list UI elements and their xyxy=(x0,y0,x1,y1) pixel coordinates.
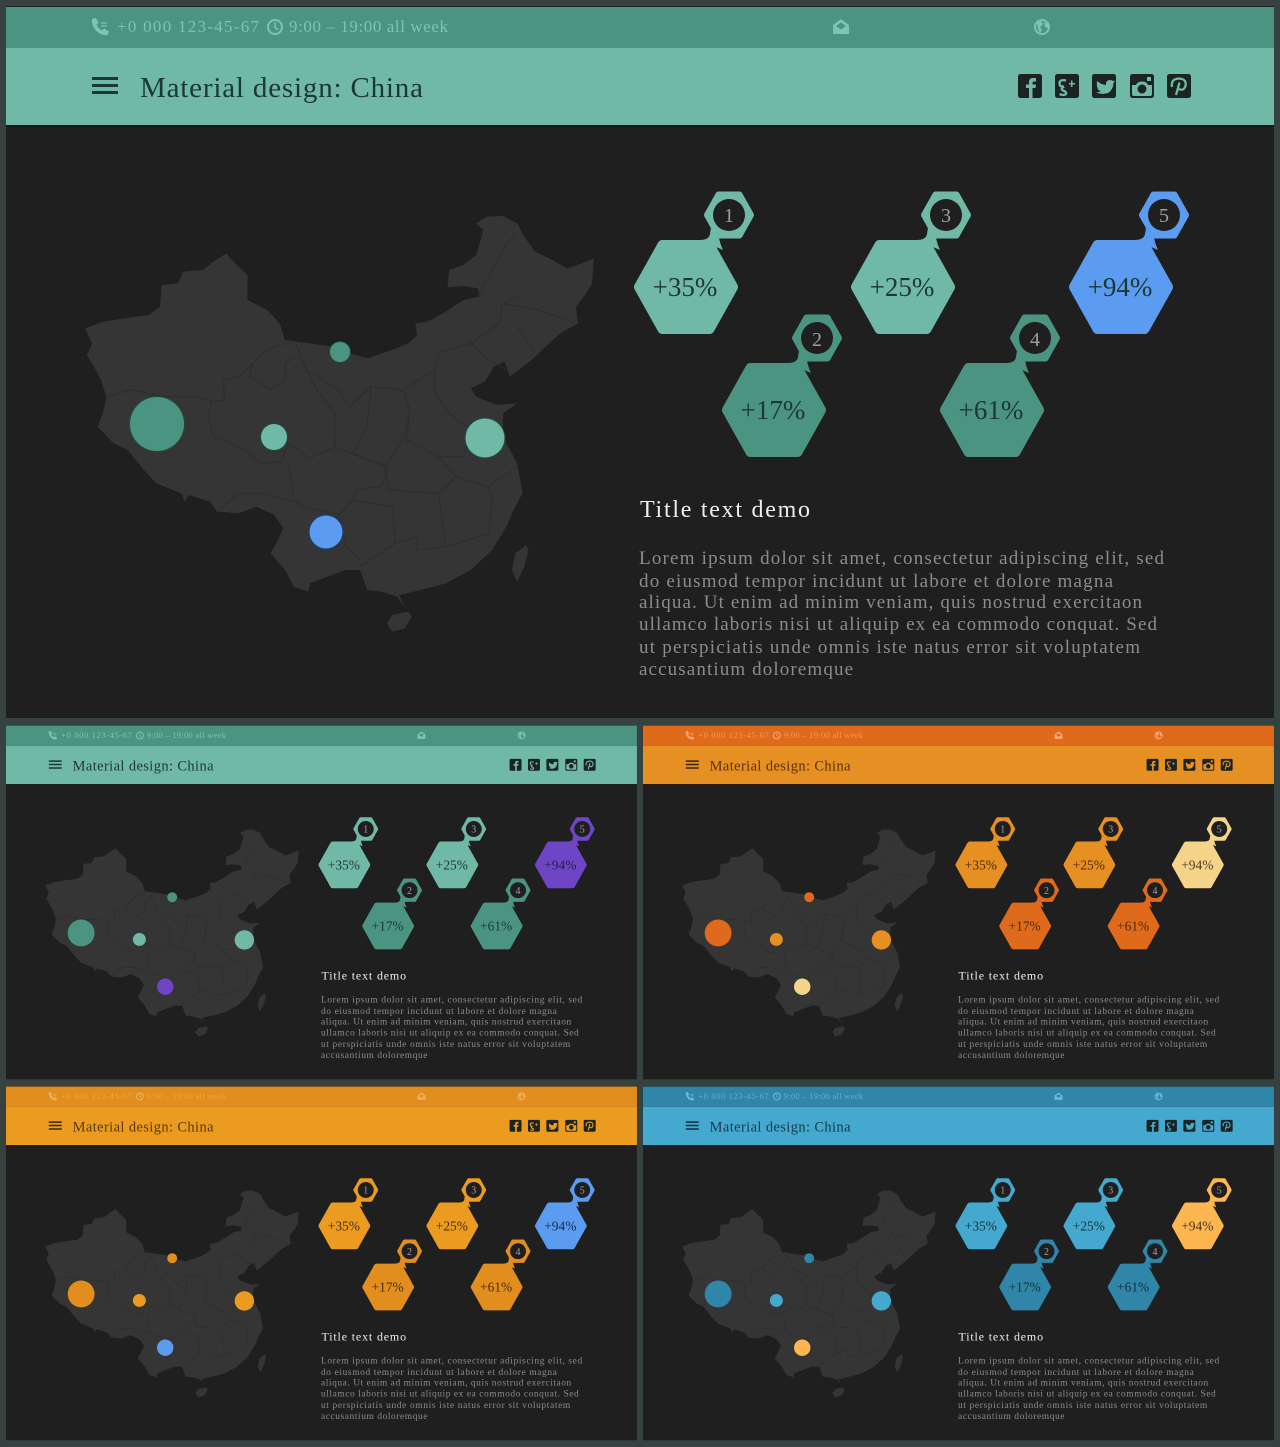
paragraph: ullamco laboris nisi ut aliquip ex ea commodo conquat. Sed xyxy=(958,1029,1216,1039)
top contact bar: +0 000 123-45-67 xyxy=(117,17,260,36)
paragraph: ut perspiciatis unde omnis iste natus error sit voluptatem xyxy=(321,1401,571,1411)
paragraph: ullamco laboris nisi ut aliquip ex ea commodo conquat. Sed xyxy=(639,614,1158,635)
top contact bar xyxy=(6,725,637,746)
paragraph: Lorem ipsum dolor sit amet, consectetur adipiscing elit, sed xyxy=(639,548,1164,569)
hexagon stat 4: +61% xyxy=(1117,1280,1149,1295)
paragraph: ut perspiciatis unde omnis iste natus error sit voluptatem xyxy=(321,1040,571,1050)
hexagon stat 3 xyxy=(856,194,968,329)
hexagon stat 1: +35% xyxy=(965,1218,997,1233)
top contact bar xyxy=(643,1086,1274,1107)
top contact bar xyxy=(6,7,1274,48)
top contact bar: 9:00 – 19:00 all week xyxy=(147,730,227,740)
paragraph: accusantium doloremque xyxy=(639,659,853,680)
hexagon stat 5: +94% xyxy=(544,857,576,872)
hexagon stat 1 xyxy=(958,1180,1014,1247)
header bar: Material design: China xyxy=(73,1119,214,1135)
top contact bar: 9:00 – 19:00 all week xyxy=(784,730,864,740)
top contact bar: +0 000 123-45-67 xyxy=(698,730,769,740)
panel: small slide blue xyxy=(643,1086,1274,1440)
header bar: Material design: China xyxy=(140,72,423,104)
hexagon stat 3: 3 xyxy=(941,205,951,227)
hexagon stat 4: 4 xyxy=(1153,1247,1158,1258)
paragraph: accusantium doloremque xyxy=(321,1051,427,1061)
header bar xyxy=(643,1107,1274,1146)
hexagon stat 5: 5 xyxy=(580,1185,585,1196)
paragraph: ullamco laboris nisi ut aliquip ex ea commodo conquat. Sed xyxy=(958,1390,1216,1400)
header bar: Material design: China xyxy=(710,758,851,774)
paragraph: Lorem ipsum dolor sit amet, consectetur adipiscing elit, sed xyxy=(321,1357,583,1367)
hexagon stat 5: +94% xyxy=(544,1218,576,1233)
hexagon stat 2 xyxy=(727,318,839,452)
hexagon stat 1: 1 xyxy=(1000,824,1005,835)
paragraph: do eiusmod tempor incidunt ut labore et dolore magna xyxy=(958,1007,1195,1017)
hexagon stat 3: +25% xyxy=(436,1218,468,1233)
hexagon stat 5: 5 xyxy=(1217,1185,1222,1196)
hexagon stat 2: 2 xyxy=(1044,1247,1049,1258)
paragraph: accusantium doloremque xyxy=(958,1051,1064,1061)
hexagon stat 4: 4 xyxy=(1030,329,1040,351)
hexagon stat 4 xyxy=(473,1241,529,1308)
header bar xyxy=(6,746,637,785)
paragraph: aliqua. Ut enim ad minim veniam, quis nostrud exercitaon xyxy=(958,1379,1209,1389)
paragraph: do eiusmod tempor incidunt ut labore et dolore magna xyxy=(321,1007,558,1017)
hexagon stat 1 xyxy=(639,194,751,329)
hexagon stat 3: +25% xyxy=(1073,857,1105,872)
text title: Title text demo xyxy=(640,497,810,523)
map of China xyxy=(45,829,299,1036)
paragraph: accusantium doloremque xyxy=(958,1412,1064,1422)
top contact bar: +0 000 123-45-67 xyxy=(698,1091,769,1101)
hexagon stat 4: 4 xyxy=(516,886,521,897)
hexagon stat 4 xyxy=(473,880,529,947)
hexagon stat 2 xyxy=(1002,1241,1058,1308)
hexagon stat 4 xyxy=(1110,1241,1166,1308)
hexagon stat 1: 1 xyxy=(363,1185,368,1196)
map of China xyxy=(85,216,594,632)
paragraph xyxy=(321,1357,583,1422)
text title: Title text demo xyxy=(958,1329,1043,1343)
hexagon stat 2: +17% xyxy=(1009,919,1041,934)
hexagon stat 4: +61% xyxy=(1117,919,1149,934)
top contact bar xyxy=(643,725,1274,746)
hexagon stat 3: +25% xyxy=(870,272,934,302)
hexagon stat 4: +61% xyxy=(480,1280,512,1295)
hexagon stat 5 xyxy=(537,1180,593,1247)
paragraph: ullamco laboris nisi ut aliquip ex ea commodo conquat. Sed xyxy=(321,1390,579,1400)
hexagon stat 1: 1 xyxy=(724,205,734,227)
hexagon stat 2: +17% xyxy=(1009,1280,1041,1295)
panel: small slide teal purple xyxy=(6,725,637,1079)
paragraph: accusantium doloremque xyxy=(321,1412,427,1422)
hexagon stat 1: +35% xyxy=(965,857,997,872)
text title: Title text demo xyxy=(958,968,1043,982)
hexagon stat 2: 2 xyxy=(407,1247,412,1258)
hexagon stat 5: +94% xyxy=(1181,1218,1213,1233)
hexagon stat 1 xyxy=(321,819,377,886)
paragraph: ullamco laboris nisi ut aliquip ex ea commodo conquat. Sed xyxy=(321,1029,579,1039)
paragraph: aliqua. Ut enim ad minim veniam, quis nostrud exercitaon xyxy=(639,592,1142,613)
hexagon stat 4: +61% xyxy=(480,919,512,934)
paragraph: aliqua. Ut enim ad minim veniam, quis nostrud exercitaon xyxy=(958,1018,1209,1028)
map of China xyxy=(45,1190,299,1397)
header bar xyxy=(643,746,1274,785)
panel: main slide teal xyxy=(6,6,1274,718)
hexagon stat 3: 3 xyxy=(1108,824,1113,835)
hexagon stat 3: 3 xyxy=(1108,1185,1113,1196)
header bar: Material design: China xyxy=(710,1119,851,1135)
hexagon stat 3: +25% xyxy=(1073,1218,1105,1233)
hexagon stat 1: 1 xyxy=(363,824,368,835)
hexagon stat 4 xyxy=(1110,880,1166,947)
header bar xyxy=(6,48,1274,127)
hexagon stat 5: 5 xyxy=(580,824,585,835)
text title: Title text demo xyxy=(321,1329,406,1343)
hexagon stat 1: +35% xyxy=(328,857,360,872)
paragraph: ut perspiciatis unde omnis iste natus error sit voluptatem xyxy=(958,1040,1208,1050)
paragraph: Lorem ipsum dolor sit amet, consectetur adipiscing elit, sed xyxy=(958,1357,1220,1367)
paragraph: aliqua. Ut enim ad minim veniam, quis nostrud exercitaon xyxy=(321,1018,572,1028)
paragraph: Lorem ipsum dolor sit amet, consectetur adipiscing elit, sed xyxy=(958,996,1220,1006)
hexagon stat 1: 1 xyxy=(1000,1185,1005,1196)
top contact bar: +0 000 123-45-67 xyxy=(61,1091,132,1101)
hexagon stat 2: 2 xyxy=(407,886,412,897)
paragraph: do eiusmod tempor incidunt ut labore et dolore magna xyxy=(639,571,1114,592)
top contact bar xyxy=(6,1086,637,1107)
hexagon stat 5: +94% xyxy=(1088,272,1152,302)
hexagon stat 5: 5 xyxy=(1217,824,1222,835)
hexagon stat 5: +94% xyxy=(1181,857,1213,872)
hexagon stat 2 xyxy=(1002,880,1058,947)
paragraph: ut perspiciatis unde omnis iste natus error sit voluptatem xyxy=(639,637,1140,658)
hexagon stat 3 xyxy=(1066,1180,1122,1247)
hexagon stat 3: +25% xyxy=(436,857,468,872)
hexagon stat 3 xyxy=(429,1180,485,1247)
hexagon stat 2: 2 xyxy=(812,329,822,351)
hexagon stat 2: +17% xyxy=(741,395,805,425)
header bar xyxy=(6,1107,637,1146)
hexagon stat 5 xyxy=(1174,819,1230,886)
paragraph xyxy=(321,996,583,1061)
hexagon stat 2 xyxy=(365,1241,421,1308)
hexagon stat 5 xyxy=(537,819,593,886)
top contact bar: +0 000 123-45-67 xyxy=(61,730,132,740)
hexagon stat 1 xyxy=(321,1180,377,1247)
panel: small slide orange xyxy=(643,725,1274,1079)
hexagon stat 2 xyxy=(365,880,421,947)
hexagon stat 3: 3 xyxy=(471,1185,476,1196)
paragraph xyxy=(958,996,1220,1061)
map of China xyxy=(682,829,936,1036)
top contact bar: 9:00 – 19:00 all week xyxy=(147,1091,227,1101)
hexagon stat 2: +17% xyxy=(372,1280,404,1295)
hexagon stat 2: 2 xyxy=(1044,886,1049,897)
hexagon stat 4: 4 xyxy=(516,1247,521,1258)
hexagon stat 5: 5 xyxy=(1159,205,1169,227)
hexagon stat 5 xyxy=(1174,1180,1230,1247)
header bar: Material design: China xyxy=(73,758,214,774)
paragraph: do eiusmod tempor incidunt ut labore et dolore magna xyxy=(321,1368,558,1378)
panel: small slide amber blue xyxy=(6,1086,637,1440)
text title: Title text demo xyxy=(321,968,406,982)
hexagon stat 1 xyxy=(958,819,1014,886)
paragraph: Lorem ipsum dolor sit amet, consectetur adipiscing elit, sed xyxy=(321,996,583,1006)
map of China xyxy=(682,1190,936,1397)
top contact bar: 9:00 – 19:00 all week xyxy=(784,1091,864,1101)
hexagon stat 1: +35% xyxy=(653,272,717,302)
paragraph xyxy=(639,548,1164,680)
paragraph: ut perspiciatis unde omnis iste natus error sit voluptatem xyxy=(958,1401,1208,1411)
top contact bar: 9:00 – 19:00 all week xyxy=(289,17,448,36)
hexagon stat 3 xyxy=(429,819,485,886)
hexagon stat 4: 4 xyxy=(1153,886,1158,897)
hexagon stat 3 xyxy=(1066,819,1122,886)
hexagon stat 5 xyxy=(1074,194,1186,329)
paragraph: do eiusmod tempor incidunt ut labore et dolore magna xyxy=(958,1368,1195,1378)
hexagon stat 4: +61% xyxy=(959,395,1023,425)
paragraph: aliqua. Ut enim ad minim veniam, quis nostrud exercitaon xyxy=(321,1379,572,1389)
hexagon stat 2: +17% xyxy=(372,919,404,934)
hexagon stat 4 xyxy=(945,318,1057,452)
hexagon stat 3: 3 xyxy=(471,824,476,835)
hexagon stat 1: +35% xyxy=(328,1218,360,1233)
paragraph xyxy=(958,1357,1220,1422)
